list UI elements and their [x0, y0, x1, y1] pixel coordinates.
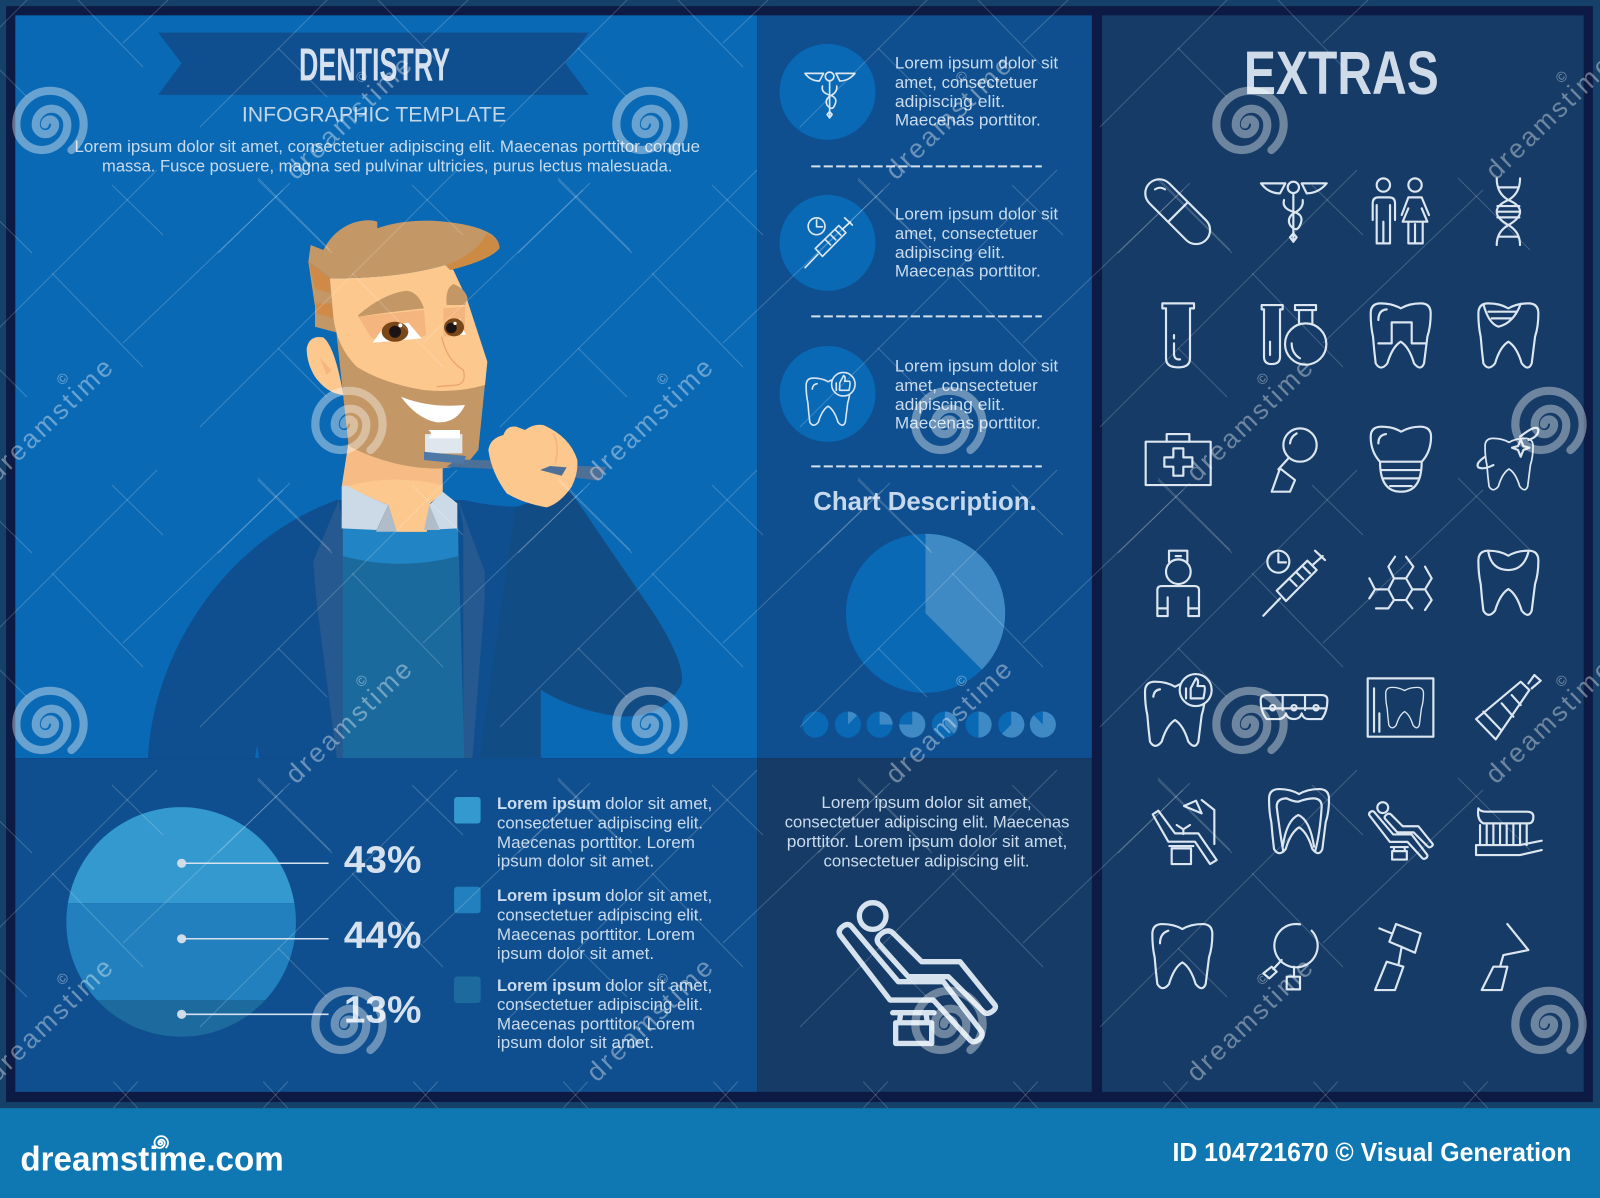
watermark overlay: dreamstime [1180, 952, 1319, 1087]
watermark overlay: © [353, 68, 372, 87]
icon: small dental chair [1369, 802, 1433, 860]
icon: pill [1139, 174, 1216, 250]
item 2 text: Maecenas porttitor. [895, 262, 1041, 281]
icon: tooth cross-section [1269, 789, 1329, 853]
legend item 1: Maecenas porttitor. Lorem [497, 833, 695, 852]
watermark overlay: © [353, 672, 372, 691]
icon grid [1139, 174, 1542, 990]
panel: middle lower background [757, 758, 1092, 1092]
subtitle: INFOGRAPHIC TEMPLATE [242, 102, 506, 126]
illustration: man brushing teeth [148, 220, 682, 758]
middle lower text block: Lorem ipsum dolor sit amet, [821, 793, 1032, 812]
callout: 13% [177, 988, 421, 1030]
panel: hero background [15, 15, 757, 758]
watermark overlay: dreamstime [879, 654, 1018, 789]
legend item 3: ipsum dolor sit amet. [497, 1033, 654, 1052]
sweater [343, 530, 464, 758]
legend item 2: Maecenas porttitor. Lorem [497, 925, 695, 944]
icon: man and woman [1373, 178, 1429, 243]
item 3 text: adipiscing elit. [895, 395, 1005, 414]
middle lower text block: consectetuer adipiscing elit. [823, 851, 1030, 870]
callout: 43%: 43% [344, 838, 421, 880]
legend item 2: consectetuer adipiscing elit. [497, 905, 703, 924]
panel: lower left statistics background [15, 758, 757, 1092]
icon: sparkling tooth [1478, 428, 1538, 490]
watermark overlay: dreamstime [879, 50, 1018, 185]
legend item 2: Lorem ipsum [497, 886, 601, 905]
item 3 text: Maecenas porttitor. [895, 414, 1041, 433]
title: DENTISTRY [299, 39, 450, 91]
legend item 1 [454, 794, 712, 870]
watermark overlay: dreamstime [1180, 352, 1319, 487]
icon: first aid kit [1146, 434, 1211, 485]
icon: toothbrush [1476, 808, 1542, 855]
legend item 1: Lorem ipsum [497, 794, 601, 813]
callout: 44% [177, 914, 421, 956]
watermark overlay: © [953, 68, 972, 87]
icon: caduceus [1261, 182, 1327, 242]
icon: syringe with clock [1263, 551, 1325, 616]
legend item 2 [454, 886, 712, 963]
icon: dental mirror [1272, 428, 1317, 492]
watermark overlay: © [654, 370, 673, 389]
item 2 text: adipiscing elit. [895, 243, 1005, 262]
item 1: caduceus icon in circle [780, 44, 876, 140]
progress pie row [802, 711, 1056, 738]
icon: toothpaste [1476, 675, 1541, 739]
item 2 text [895, 204, 1058, 281]
icon: dental probe [1482, 924, 1528, 990]
watermark overlay: dreamstime [279, 654, 418, 789]
item 3 text: Lorem ipsum dolor sit [895, 356, 1058, 375]
watermark overlay: © [1254, 370, 1273, 389]
item 2: syringe icon in circle [780, 195, 876, 291]
stacked circle chart [61, 806, 301, 1041]
pie chart [846, 534, 1005, 693]
watermark overlay: dreamstime [580, 352, 719, 487]
legend item 1: consectetuer adipiscing elit. [497, 814, 703, 833]
item 1 text: Maecenas porttitor. [895, 111, 1041, 130]
intro text block: Lorem ipsum dolor sit amet, consectetuer adipiscing elit. Maecenas porttitor congue [74, 137, 700, 156]
watermark overlay: © [1553, 68, 1572, 87]
item 2 text: amet, consectetuer [895, 224, 1038, 243]
item 1 text: Lorem ipsum dolor sit [895, 53, 1058, 72]
icon: tooth with crown [1371, 303, 1431, 368]
left lapel [313, 500, 344, 758]
head [307, 220, 607, 532]
middle lower text block: porttitor. Lorem ipsum dolor sit amet, [787, 832, 1067, 851]
item 3 text [895, 356, 1058, 433]
legend item 1: dolor sit amet, [605, 794, 712, 813]
icon: ring tool [1263, 924, 1318, 989]
icon: braces [1261, 695, 1327, 719]
sweater collar band [343, 528, 458, 564]
callout: 13%: 13% [344, 988, 421, 1030]
title banner [158, 33, 589, 95]
icon: tooth with thumbs up [1145, 674, 1212, 746]
legend item 3: Lorem ipsum [497, 976, 601, 995]
watermark overlay: © [54, 370, 73, 389]
legend item 3: consectetuer adipiscing elit. [497, 995, 703, 1014]
watermark overlay: dreamstime [580, 952, 719, 1087]
watermark overlay: © [654, 970, 673, 989]
item 1 text: amet, consectetuer [895, 73, 1038, 92]
icon: test tube and flask [1262, 305, 1326, 365]
item 3 text: amet, consectetuer [895, 376, 1038, 395]
extras heading: EXTRAS [1244, 39, 1439, 107]
icon: large dental chair [839, 903, 995, 1043]
jacket [148, 500, 541, 758]
intro text block: massa. Fusce posuere, magna sed pulvinar ultricies, purus lectus malesuada. [102, 156, 672, 175]
item 1 text: adipiscing elit. [895, 92, 1005, 111]
callout: 44%: 44% [344, 914, 421, 956]
legend item 3 [454, 976, 712, 1052]
middle lower text block [785, 793, 1069, 870]
item 1 text [895, 53, 1058, 130]
icon: test tube [1162, 303, 1194, 367]
watermark overlay: © [54, 970, 73, 989]
callout: 43% [177, 838, 421, 880]
icon: dental unit [1153, 800, 1217, 864]
intro text block [74, 137, 700, 175]
icon: dental implant [1371, 427, 1431, 492]
panel: middle column background [757, 15, 1092, 758]
footer bar [0, 1108, 1600, 1198]
icon: plain tooth [1152, 924, 1212, 988]
icon: tooth with decay [1478, 303, 1538, 368]
watermark overlay: © [953, 672, 972, 691]
footer logo: dreamstime.com [20, 1140, 284, 1178]
icon: tooth with top cavity [1478, 551, 1538, 615]
right lapel [458, 500, 485, 758]
legend item 1: ipsum dolor sit amet. [497, 851, 654, 870]
icon: molecule [1369, 557, 1432, 610]
icon: dental drill [1375, 924, 1421, 990]
icon: x-ray [1368, 678, 1433, 737]
icon: nurse [1157, 551, 1199, 616]
jacket arm [480, 490, 682, 758]
item 2 text: Lorem ipsum dolor sit [895, 204, 1058, 223]
middle lower text block: consectetuer adipiscing elit. Maecenas [785, 813, 1069, 832]
legend item 2: dolor sit amet, [605, 886, 712, 905]
item 3: tooth with thumbs up icon in circle [780, 346, 876, 442]
legend item 3: Maecenas porttitor. Lorem [497, 1015, 695, 1034]
watermark overlay: dreamstime [279, 50, 418, 185]
legend item 3: dolor sit amet, [605, 976, 712, 995]
panel: extras background [1102, 15, 1584, 1092]
watermark overlay: © [1553, 672, 1572, 691]
footer credit: ID 104721670 © Visual Generation [1172, 1139, 1571, 1167]
chart heading: Chart Description. [813, 488, 1037, 516]
icon: DNA helix [1497, 178, 1520, 245]
watermark overlay: © [1254, 970, 1273, 989]
legend item 2: ipsum dolor sit amet. [497, 944, 654, 963]
